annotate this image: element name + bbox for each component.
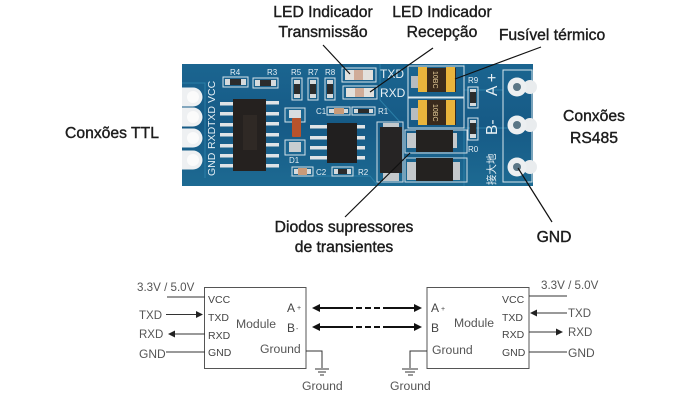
label: LED Indicador Transmissão: Transmissão [278, 24, 368, 41]
silkscreen labels: C2 [316, 168, 327, 177]
left module texts: Ground [260, 342, 301, 356]
RS485 terminals [503, 70, 537, 182]
left external labels: GND [139, 347, 166, 361]
silkscreen labels: R1 [378, 107, 389, 116]
LED labels [380, 67, 406, 100]
board base [182, 64, 533, 186]
right external labels: TXD [568, 308, 591, 320]
right module texts: VCC [502, 294, 525, 306]
right module box [427, 288, 529, 368]
right external labels: RXD [568, 327, 592, 339]
right module diagram [390, 279, 599, 393]
left external labels: Ground [302, 379, 343, 393]
right module texts: + [441, 306, 445, 313]
RS485 terminal labels [484, 73, 501, 185]
resistors [223, 77, 478, 176]
RS485 terminal labels: A + [484, 73, 501, 96]
right module texts: RXD [502, 329, 525, 341]
left module texts: B [287, 321, 295, 335]
left module box [204, 288, 306, 368]
right module texts: Module [454, 316, 494, 330]
right module texts: A [431, 301, 439, 315]
left module texts: TXD [208, 312, 229, 324]
leader lines [323, 45, 552, 222]
orange diode [292, 118, 301, 137]
label: GND: GND [537, 229, 571, 246]
right module texts: Ground [432, 343, 473, 357]
left module diagram [137, 281, 343, 393]
thermal fuses [408, 66, 464, 128]
TTL pin labels: TXD [206, 106, 218, 127]
left wires [166, 297, 329, 375]
silkscreen labels: R0 [468, 145, 479, 154]
circuit board [182, 64, 537, 186]
LED labels: RXD [380, 86, 406, 100]
label: Fusível térmico: Fusível térmico [499, 27, 605, 44]
LED labels: TXD [380, 67, 404, 81]
suppressor diodes [377, 122, 467, 182]
silkscreen labels: R8 [325, 68, 336, 77]
silkscreen labels: R9 [468, 76, 479, 85]
left module texts: A [287, 301, 295, 315]
TTL pin labels: RXD [206, 126, 218, 149]
left module texts: VCC [208, 294, 231, 306]
silkscreen labels: D1 [289, 156, 300, 165]
right external labels: 3.3V / 5.0V [541, 279, 599, 292]
left module texts: GND [208, 347, 232, 359]
right module texts [431, 294, 526, 359]
silkscreen labels: R2 [358, 168, 369, 177]
left module texts [208, 294, 301, 359]
silkscreen labels: R3 [267, 68, 278, 77]
RS485 link arrows [312, 304, 422, 331]
right arrowheads [530, 310, 563, 336]
right module texts: TXD [502, 312, 523, 324]
left module texts: + [297, 305, 301, 312]
right external labels: GND [568, 346, 595, 360]
silkscreen labels: C1 [316, 107, 327, 116]
label: Conxões RS485: RS485 [570, 130, 618, 147]
silkscreen labels: R5 [291, 68, 302, 77]
TTL pin pads [182, 88, 202, 170]
TTL pin labels: VCC [206, 80, 218, 103]
silkscreen labels: R7 [308, 68, 319, 77]
right module texts: GND [502, 347, 526, 359]
label: LED Indicador Recepção: Recepção [407, 24, 478, 41]
right wires [402, 296, 567, 375]
RS485 terminal labels: 接大地 [485, 153, 498, 185]
thermal fuses: 10BC [431, 104, 438, 122]
label: LED Indicador Transmissão: LED Indicador [273, 4, 373, 21]
right external labels: Ground [390, 379, 431, 393]
left module texts: RXD [208, 330, 231, 342]
left arrowheads [168, 311, 203, 338]
silkscreen labels [230, 68, 479, 177]
label: Conxões TTL: Conxões TTL [65, 125, 159, 142]
TTL pin labels: GND [206, 152, 218, 176]
chip 2 [310, 123, 365, 163]
RS485 terminal labels: B- [484, 120, 501, 135]
silkscreen labels: R4 [230, 68, 241, 77]
label: Diodos supressores de transientes: de transientes [295, 239, 393, 256]
label: Conxões RS485: Conxões [563, 108, 625, 125]
TTL pin labels [206, 80, 218, 176]
LEDs [342, 68, 377, 99]
left external labels: 3.3V / 5.0V [137, 281, 195, 294]
left external labels: RXD [139, 329, 163, 341]
left external labels [137, 281, 343, 393]
right module texts: B [431, 321, 439, 335]
left external labels: TXD [139, 310, 162, 322]
left module texts: - [296, 326, 299, 333]
label: LED Indicador Recepção: LED Indicador [392, 4, 492, 21]
label: Diodos supressores de transientes: Diodos supressores [275, 219, 413, 236]
thermal fuses: 10BC [431, 71, 438, 89]
right external labels [390, 279, 599, 393]
left module texts: Module [236, 317, 276, 331]
chip 1 [220, 99, 279, 171]
